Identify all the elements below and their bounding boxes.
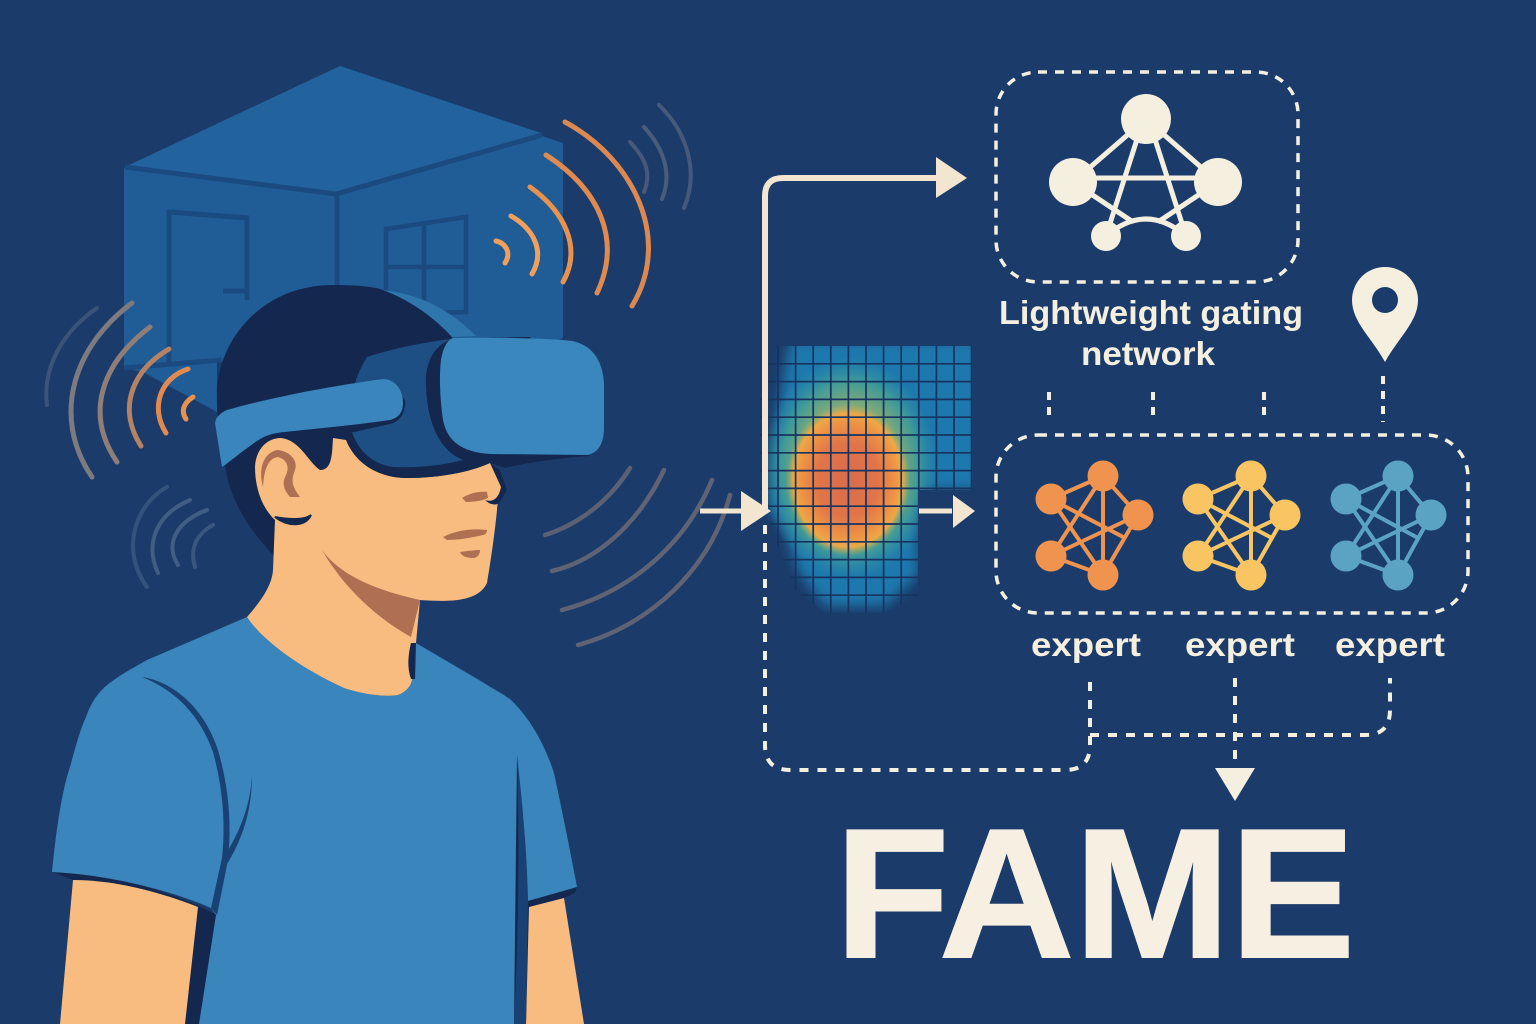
panel: experts [996,435,1468,613]
headset front [440,338,604,455]
left arm [60,880,198,1024]
expert labels: expert [1335,626,1445,663]
t-shirt [52,617,577,1024]
head strap top [383,290,476,337]
neck shadow [322,550,420,637]
expert labels [1031,626,1445,663]
visor shell [351,339,463,467]
icon: location pin [1352,267,1418,362]
hair [217,285,470,556]
expert labels: expert [1031,626,1141,663]
torso right fold [514,755,528,1024]
strap [215,379,403,467]
input arrow [700,491,771,531]
sleeve seam [142,677,230,915]
panel: lightweight gating network [996,72,1298,282]
facial features: nose, lips [443,492,488,558]
right arm [526,898,584,1024]
nose outline [485,463,507,504]
dashed return path [765,525,1390,770]
door [169,212,247,364]
ear lobe line [275,515,311,524]
ear detail [261,450,300,497]
orange expert network [1036,460,1154,590]
window [386,217,466,314]
solid flow line to gating network [765,157,967,510]
neck dark sliver [408,643,416,679]
neck and face [247,438,502,696]
title: FAME: FAME [835,790,1355,996]
right arm shadow [514,755,584,1024]
person [52,285,604,1024]
sleeve fold [221,775,252,872]
strap shadow [350,385,405,433]
label: lightweight gating network: Lightweight gating [999,294,1303,331]
heatmap [760,340,980,625]
arm shadow [52,872,217,1024]
network icon [1049,94,1242,251]
sound waves left [46,303,213,587]
label: network: network [1081,335,1216,372]
yellow expert network [1182,460,1300,590]
expert labels: expert [1185,626,1295,663]
house outline behind the person [124,66,563,412]
arrow heatmap to experts [919,495,975,528]
blue expert network [1330,460,1446,590]
sound waves upper right [496,105,691,306]
sound waves lower right [545,468,730,645]
visor shell dark base [347,337,590,478]
dashed connectors to experts [1049,376,1383,422]
output arrow head [1215,768,1255,801]
